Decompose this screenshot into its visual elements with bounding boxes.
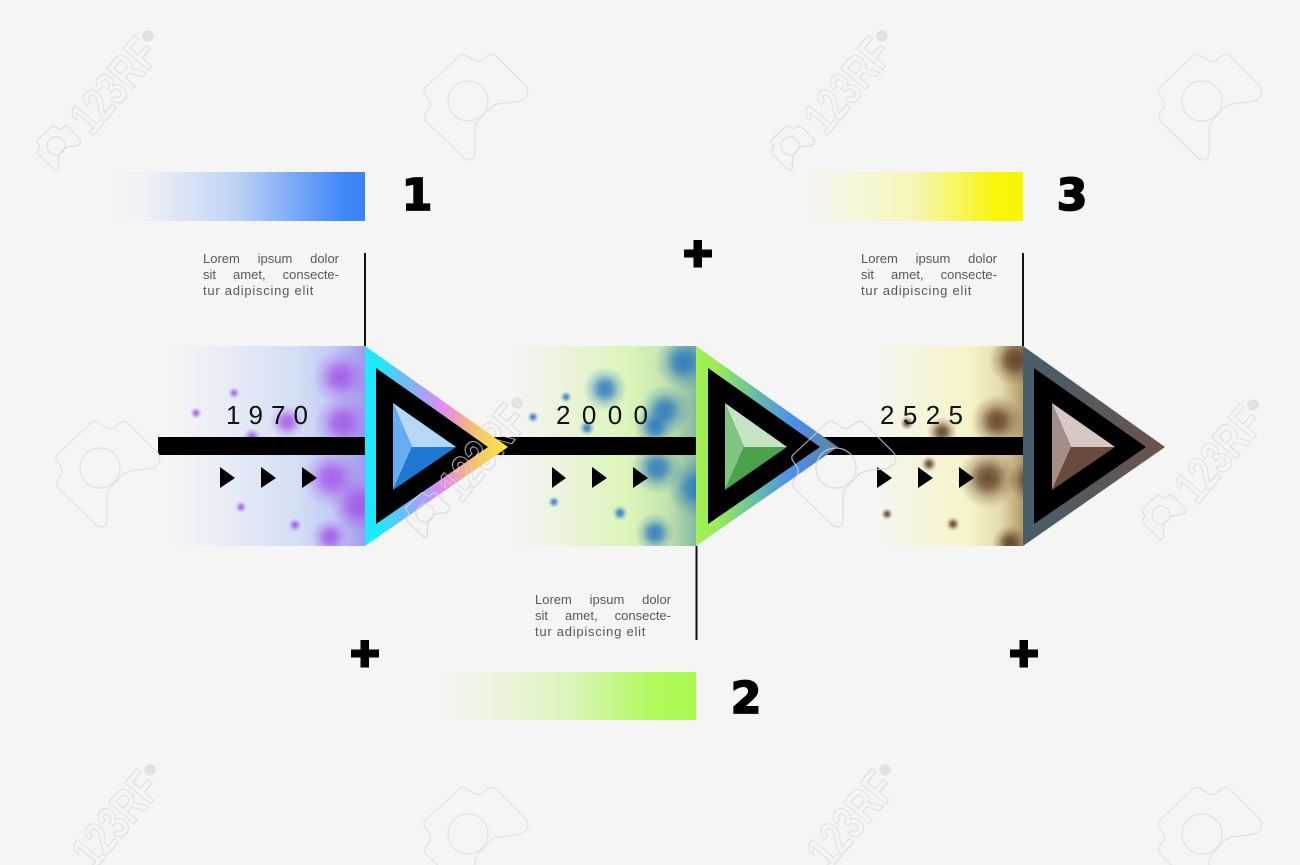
- number 2: 2: [731, 673, 761, 724]
- text block 3: [861, 251, 997, 298]
- plus icon top centre: [684, 240, 712, 268]
- small arrows panel 1: [220, 467, 317, 488]
- timeline bar: [158, 437, 1023, 455]
- text block 2: tur adipiscing elit: [535, 624, 646, 639]
- plus icon bottom left: [351, 640, 379, 668]
- arrow head 3: brown pyramid: [1023, 346, 1165, 546]
- number 1: 1: [402, 170, 432, 221]
- year 1970: 1970: [226, 400, 308, 430]
- watermark egg bottom right: [1158, 787, 1262, 865]
- watermark egg top right: [1158, 54, 1262, 160]
- arrow head 2: green pyramid: [696, 346, 838, 546]
- connector line 3: [1022, 253, 1024, 346]
- text block 3: Lorem ipsum dolor: [861, 251, 997, 266]
- text block 2: Lorem ipsum dolor: [535, 592, 671, 607]
- watermark logo bottom left: [62, 762, 171, 865]
- text block 1: [203, 251, 339, 298]
- watermark logo top middle: [771, 28, 903, 170]
- connector line 2: [696, 546, 698, 640]
- text block 1: tur adipiscing elit: [203, 283, 314, 298]
- small arrows panel 2: [552, 467, 648, 488]
- number 3: 3: [1057, 170, 1087, 221]
- watermark logo bottom middle: [797, 762, 906, 865]
- panel: 2000 gradient with blue blobs: [527, 346, 696, 546]
- text block 2: [535, 592, 671, 639]
- year 2000: 2000: [556, 400, 648, 430]
- watermark logo centre right: [1142, 397, 1274, 539]
- text block 2: sit amet, consecte-: [535, 608, 671, 623]
- watermark egg top middle: [424, 54, 528, 160]
- watermark logo top middle: 123RF: [794, 28, 903, 144]
- small arrows panel 3: [877, 467, 974, 488]
- panel: 1970 gradient with purple blobs: [190, 346, 365, 546]
- year 2525: 2525: [880, 400, 963, 430]
- text block 3: tur adipiscing elit: [861, 283, 972, 298]
- watermark logo centre right: 123RF: [1165, 397, 1274, 513]
- watermark egg centre left: [56, 421, 160, 527]
- watermark egg bottom middle: [424, 787, 528, 865]
- text block 1: sit amet, consecte-: [203, 267, 339, 282]
- connector line 1: [364, 253, 366, 346]
- watermark logo centre left: 123RF: [429, 395, 538, 511]
- watermark egg centre right: [792, 421, 896, 527]
- arrow head 1: blue pyramid: [365, 346, 508, 546]
- watermark logo top left: 123RF: [60, 28, 169, 144]
- bar: step 3 gradient: [805, 172, 1023, 221]
- text block 1: Lorem ipsum dolor: [203, 251, 339, 266]
- bar: step 2 gradient: [438, 672, 696, 720]
- panel: 2525 gradient with brown blobs: [881, 346, 1023, 546]
- text block 3: sit amet, consecte-: [861, 267, 997, 282]
- watermark logo centre left: [406, 395, 538, 537]
- plus icon bottom right: [1010, 640, 1038, 668]
- bar: step 1 gradient: [110, 172, 365, 221]
- watermark logo top left: [37, 28, 169, 170]
